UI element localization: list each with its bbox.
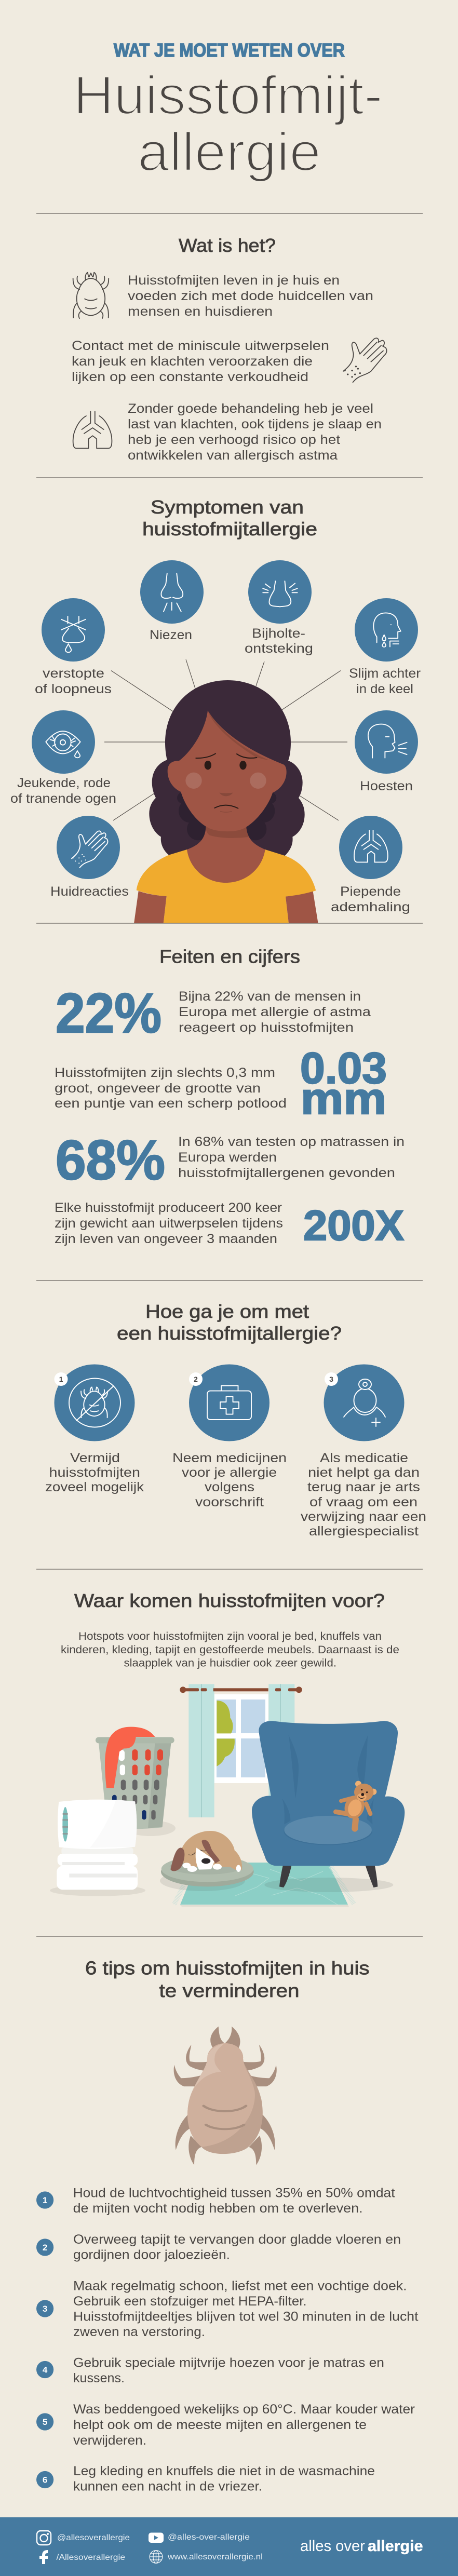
tip 3: Maak regelmatig schoon, liefst met een vochtige doek.	[73, 2278, 407, 2293]
handle: facebook: /Allesoverallergie	[56, 2553, 125, 2562]
tip 5	[36, 2402, 415, 2448]
stat: 68%	[56, 1128, 405, 1191]
text: hotspots	[61, 1630, 399, 1669]
tip 3: Gebruik een stofzuiger met HEPA-filter.	[73, 2294, 307, 2309]
symptom: hoesten	[355, 710, 418, 793]
tip 4: 4	[43, 2365, 48, 2375]
tip 1	[36, 2186, 395, 2216]
step 1: avoid mites: zoveel mogelijk	[45, 1480, 144, 1494]
panel: feiten en cijfers	[55, 946, 405, 1249]
text: without treatment: ontwikkelen van allergisch astma	[128, 448, 338, 463]
stat: 200X	[55, 1201, 404, 1249]
tip 5: helpt ook om de meeste mijten en allergenen te	[73, 2418, 367, 2432]
stat: 22%: 22%	[56, 981, 161, 1044]
heading: tips	[85, 1958, 370, 2001]
tip 2: 2	[43, 2243, 47, 2253]
tip 4: Gebruik speciale mijtvrije hoezen voor je matras en	[73, 2355, 384, 2370]
floor shadows	[50, 1820, 393, 1896]
step 2: medicine: volgens	[205, 1480, 254, 1494]
footer	[0, 2517, 458, 2576]
step 2: medicine: voor je allergie	[182, 1465, 277, 1480]
kicker: WAT JE MOET WETEN OVER	[114, 39, 345, 61]
stat: 200X: zijn gewicht aan uitwerpselen tijdens	[55, 1216, 283, 1231]
tip 6: Leg kleding en knuffels die niet in de wasmachine	[73, 2464, 375, 2478]
step 1: avoid mites: Vermijd	[70, 1451, 120, 1465]
rug	[174, 1863, 354, 1907]
tip 1: de mijten vocht nodig hebben om te overleven.	[73, 2201, 363, 2216]
stat: 22%: Europa met allergie of astma	[179, 1005, 371, 1019]
heading: hoe ga je om: een huisstofmijtallergie?	[117, 1323, 342, 1344]
symptom: piepende ademhaling	[331, 816, 410, 914]
illustration: room scene	[50, 1684, 405, 1907]
illustration: woman with allergy	[134, 680, 318, 923]
stat: 200X: Elke huisstofmijt produceert 200 keer	[55, 1201, 282, 1215]
header	[73, 39, 383, 183]
tip 5: Was beddengoed wekelijks op 60°C. Maar kouder water	[73, 2402, 415, 2417]
tip 3: 3	[43, 2304, 47, 2314]
tip 3	[36, 2278, 419, 2339]
heading: symptomen	[142, 496, 317, 540]
logo: alles over	[300, 2538, 365, 2555]
symptom: verstopte of loopneus: verstopte	[43, 666, 104, 681]
text: hotspots: Hotspots voor huisstofmijten zijn vooral je bed, knuffels van	[78, 1630, 382, 1642]
tip 5: verwijderen.	[73, 2433, 146, 2448]
tip 4: kussens.	[73, 2371, 125, 2385]
step 3: doctor: terug naar je arts	[307, 1480, 420, 1494]
symptom: bijholteontsteking	[245, 560, 313, 656]
stat: 200X: zijn leven van ongeveer 3 maanden	[55, 1232, 277, 1246]
heading: tips: 6 tips om huisstofmijten in huis	[85, 1958, 370, 1979]
tip 3: Huisstofmijtdeeltjes blijven tot wel 30 minuten in de lucht	[73, 2310, 419, 2324]
symptom: piepende ademhaling: ademhaling	[331, 900, 410, 914]
symptom: bijholteontsteking: Bijholte-	[252, 626, 305, 641]
tip 2: gordijnen door jaloezieën.	[73, 2248, 230, 2262]
logo	[300, 2538, 423, 2555]
tip 1: 1	[43, 2195, 47, 2205]
handle: instagram: @allesoverallergie	[57, 2533, 130, 2542]
panel: waar komen huisstofmijten voor	[50, 1590, 405, 1907]
symptom: huidreacties	[50, 816, 129, 899]
text: contact: lijken op een constante verkoudheid	[72, 370, 308, 384]
step 3: doctor: Als medicatie	[320, 1451, 408, 1465]
symptom: bijholteontsteking: ontsteking	[245, 641, 313, 656]
stat: 22%	[56, 981, 371, 1044]
step 3: doctor: 3	[329, 1375, 333, 1383]
stat: 0.03 mm: Huisstofmijten zijn slechts 0,3 mm	[55, 1066, 275, 1080]
tip 2: Overweeg tapijt te vervangen door gladde vloeren en	[73, 2232, 401, 2247]
stat: 68%: Europa werden	[178, 1150, 277, 1165]
stat: 0.03 mm: 0.03	[300, 1044, 387, 1093]
symptom: verstopte of loopneus	[35, 598, 112, 696]
heading: symptomen: huisstofmijtallergie	[142, 518, 317, 540]
symptom: piepende ademhaling: Piepende	[340, 884, 401, 899]
step 1: avoid mites: 1	[59, 1375, 63, 1383]
text: mites feed on skin: mensen en huisdieren	[128, 304, 273, 319]
tip 6	[36, 2464, 375, 2494]
stat: 68%: 68%	[56, 1128, 165, 1191]
symptom: jeukende ogen: Jeukende, rode	[17, 776, 111, 790]
symptom: jeukende ogen	[10, 710, 116, 806]
symptom: slijm achter in de keel	[349, 598, 421, 696]
heading: feiten: Feiten en cijfers	[159, 946, 300, 967]
heading: wat is het: Wat is het?	[179, 235, 276, 256]
panel: hoe ga je om	[45, 1301, 426, 1539]
title: allergie	[138, 122, 321, 183]
icon: instagram	[37, 2531, 51, 2545]
window	[214, 1694, 268, 1783]
step 3: doctor: allergiespecialist	[309, 1524, 419, 1539]
teddy bear	[336, 1781, 376, 1829]
heading: hoe ga je om	[117, 1301, 342, 1344]
laundry basket	[96, 1727, 174, 1829]
tip 5: 5	[43, 2417, 47, 2427]
step 2: medicine: voorschrift	[195, 1495, 264, 1509]
panel: wat is het	[72, 235, 387, 463]
symptom: verstopte of loopneus: of loopneus	[35, 682, 112, 696]
text: contact: kan jeuk en klachten veroorzaken die	[72, 354, 313, 369]
text: hotspots: kinderen, kleding, tapijt en gestoffeerde meubels. Daarnaast is de	[61, 1644, 399, 1656]
handle: youtube: @alles-over-allergie	[168, 2533, 250, 2542]
symptom: slijm achter in de keel: Slijm achter	[349, 666, 421, 681]
heading: hoe ga je om: Hoe ga je om met	[145, 1301, 309, 1322]
text: hotspots: slaapplek van je huisdier ook zeer gewild.	[124, 1657, 336, 1669]
stat: 22%: Bijna 22% van de mensen in	[179, 989, 361, 1004]
illustration: house dust mite	[174, 2027, 277, 2165]
stat: 68%: huisstofmijtallergenen gevonden	[178, 1166, 395, 1180]
tip 6: 6	[43, 2475, 47, 2485]
text: without treatment: heb je een verhoogd risico op het	[128, 433, 340, 447]
step 3: doctor: verwijzing naar een	[301, 1509, 426, 1524]
text: mites feed on skin	[128, 273, 373, 319]
stat: 0.03 mm: een puntje van een scherp potlood	[55, 1096, 287, 1111]
symptom: niezen	[140, 560, 204, 642]
tip 4	[36, 2355, 384, 2385]
tip 2	[36, 2232, 401, 2262]
text: contact: Contact met de miniscule uitwerpselen	[72, 339, 329, 353]
stat: 68%: In 68% van testen op matrassen in	[178, 1135, 405, 1149]
title	[73, 65, 383, 183]
connector lines	[104, 659, 347, 820]
stat: 0.03 mm: mm	[301, 1074, 386, 1124]
step 2: medicine	[172, 1365, 287, 1509]
text: mites feed on skin: Huisstofmijten leven in je huis en	[128, 273, 340, 288]
step 1: avoid mites	[45, 1365, 144, 1494]
icon: mite outline	[73, 273, 109, 318]
step 2: medicine: 2	[194, 1375, 198, 1383]
icon: globe	[150, 2551, 163, 2563]
symptom: niezen: Niezen	[150, 628, 192, 642]
icon: lungs	[73, 412, 112, 448]
stat: 22%: reageert op huisstofmijten	[179, 1020, 354, 1035]
panel: 6 tips	[36, 1958, 419, 2494]
step 3: doctor: niet helpt ga dan	[308, 1465, 420, 1480]
armchair	[252, 1721, 405, 1887]
step 1: avoid mites: huisstofmijten	[49, 1465, 140, 1480]
heading: symptomen: Symptomen van	[151, 496, 304, 518]
website: www.allesoverallergie.nl	[167, 2553, 263, 2561]
icon: facebook	[39, 2550, 48, 2564]
curtains and rod	[180, 1684, 302, 1817]
title: Huisstofmijt-	[73, 65, 383, 126]
step 3: doctor	[301, 1365, 426, 1539]
icon: youtube	[149, 2533, 164, 2543]
heading: waar: Waar komen huisstofmijten voor?	[74, 1590, 385, 1611]
heading: tips: te verminderen	[159, 1980, 299, 2001]
text: without treatment: Zonder goede behandeling heb je veel	[128, 401, 373, 416]
step 2: medicine: Neem medicijnen	[172, 1451, 287, 1465]
logo: allergie	[368, 2538, 423, 2555]
step 3: doctor: of vraag om een	[309, 1495, 417, 1509]
tip 3: zweven na verstoring.	[73, 2325, 205, 2339]
text: contact	[72, 339, 329, 384]
symptom: jeukende ogen: of tranende ogen	[10, 791, 116, 806]
symptom: huidreacties: Huidreacties	[50, 884, 129, 899]
stat: 0.03 mm	[55, 1044, 387, 1124]
icon: hand with rash	[343, 338, 387, 382]
text: without treatment: last van klachten, ook tijdens je slaap en	[128, 417, 382, 431]
stat: 0.03 mm: groot, ongeveer de grootte van	[55, 1081, 261, 1096]
sleeping dog on cushion	[161, 1831, 254, 1886]
text: without treatment	[128, 401, 382, 463]
panel: symptomen	[10, 496, 421, 923]
symptom: slijm achter in de keel: in de keel	[356, 682, 413, 696]
pillow and folded blankets	[57, 1800, 138, 1890]
tip 6: kunnen een nacht in de vriezer.	[73, 2479, 262, 2494]
stat: 200X: 200X	[303, 1202, 404, 1249]
symptom: hoesten: Hoesten	[360, 779, 413, 793]
tip 1: Houd de luchtvochtigheid tussen 35% en 50% omdat	[73, 2186, 395, 2201]
text: mites feed on skin: voeden zich met dode huidcellen van	[128, 289, 373, 303]
